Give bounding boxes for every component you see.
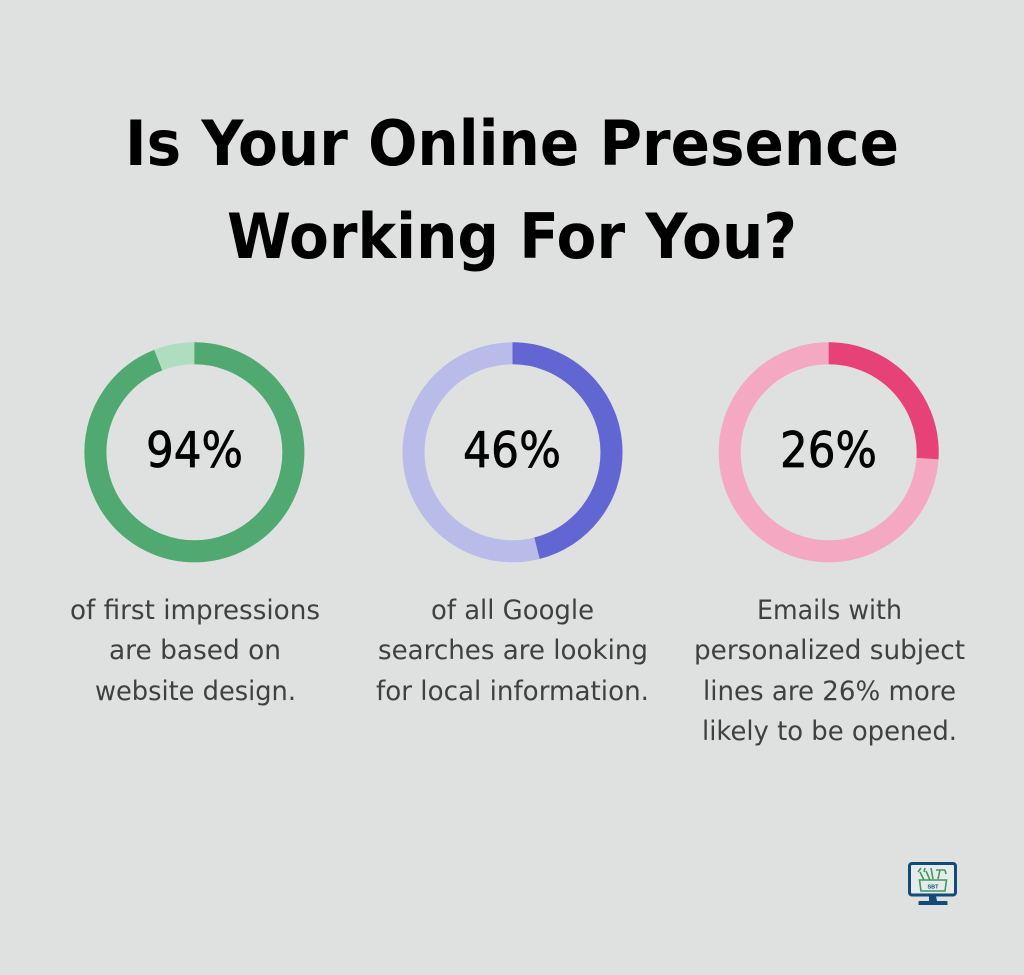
panel: 26% personalized emails <box>694 353 965 747</box>
text: personalized emails caption: lines are 26% more <box>703 676 956 707</box>
title: Is Your Online Presence <box>125 107 899 180</box>
icon: monitor with toolbox logo: SBT <box>928 884 939 890</box>
title <box>125 107 899 273</box>
text: first impressions caption: of first impressions <box>70 595 320 626</box>
text: local searches caption: of all Google <box>431 595 594 626</box>
donut chart: 26% <box>730 353 928 551</box>
value: 94%: 94% <box>146 422 243 479</box>
donut chart: 94% <box>95 353 293 551</box>
text: personalized emails caption: likely to be opened. <box>702 716 957 747</box>
value: 46%: 46% <box>463 422 561 479</box>
text: personalized emails caption <box>694 595 965 747</box>
text: first impressions caption: are based on <box>109 635 281 666</box>
text: personalized emails caption: personalized subject <box>694 635 965 666</box>
donut chart: 46% <box>414 353 612 551</box>
value: 26%: 26% <box>780 422 877 479</box>
text: first impressions caption: website design. <box>95 676 296 707</box>
title: Working For You? <box>227 200 797 273</box>
text: local searches caption: searches are looking <box>378 635 648 666</box>
panel: 94% first impressions <box>70 353 320 707</box>
icon: monitor with toolbox logo <box>910 864 956 905</box>
text: first impressions caption <box>70 595 320 707</box>
text: local searches caption: for local information. <box>376 676 649 707</box>
text: personalized emails caption: Emails with <box>757 595 902 626</box>
panel: 46% local searches <box>376 353 649 707</box>
text: local searches caption <box>376 595 649 707</box>
